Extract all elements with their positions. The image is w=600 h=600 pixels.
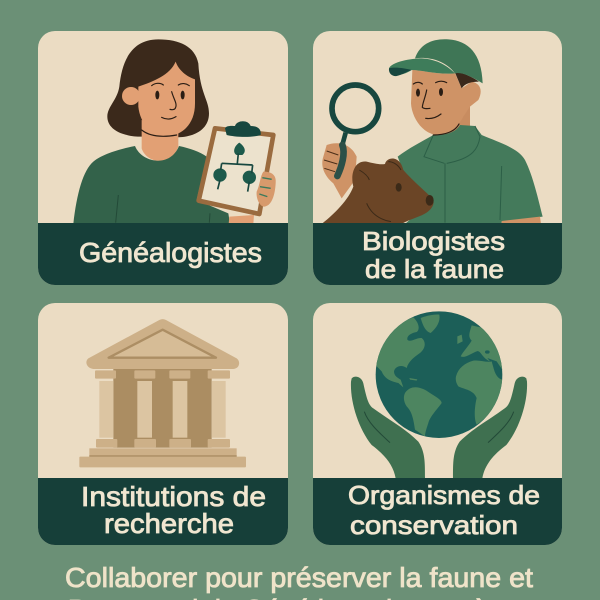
label: Biologistes de la faune [362, 226, 505, 284]
label: Biologistes de la faune: Biologistes [362, 226, 505, 256]
footer headline: Collaborer pour préserver la faune et [65, 562, 533, 593]
panel: Généalogistes [38, 31, 288, 285]
panel: Organismes de conservation [313, 303, 562, 545]
illustration: woman holding a family tree clipboard [73, 39, 276, 224]
label: Généalogistes: Généalogistes [79, 237, 262, 268]
label: Organismes de conservation: conservation [350, 510, 518, 540]
label: Organismes de conservation: Organismes de [348, 480, 540, 510]
panel: Institutions de recherche [38, 303, 288, 545]
panel: Biologistes de la faune [313, 31, 562, 285]
label: Institutions de recherche [81, 481, 266, 539]
label: Institutions de recherche: recherche [104, 508, 234, 539]
label: Institutions de recherche: Institutions de [81, 481, 266, 512]
illustration: two cupped hands [351, 377, 527, 478]
label: Biologistes de la faune: de la faune [365, 254, 504, 284]
illustration: biologist with magnifying glass and bear [322, 39, 543, 224]
label: Organismes de conservation [348, 480, 540, 540]
illustration: globe [373, 311, 505, 438]
illustration: classical temple [79, 319, 246, 467]
